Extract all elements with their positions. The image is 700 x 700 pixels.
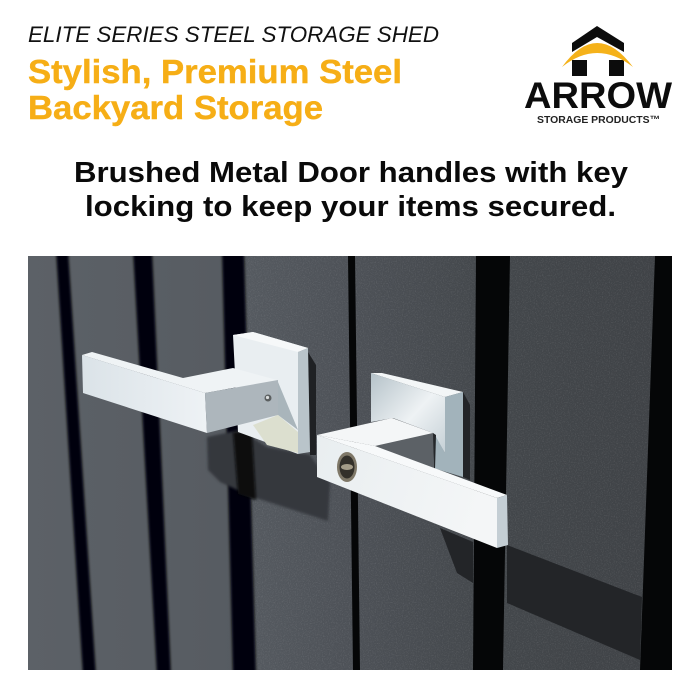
key lock cylinder [337,452,357,482]
photo: door handles on steel shed [28,250,672,676]
right door handle [317,373,508,548]
feature description: Brushed Metal Door handles with key [74,157,628,189]
shadow of left handle [207,430,330,521]
lever recess [375,433,434,468]
yellow heading [28,53,402,126]
mounting plate [371,373,463,397]
logo wordmark: ARROW [524,75,672,116]
left door handle [82,332,310,454]
feature description [74,157,628,223]
mounting plate [233,332,308,454]
Arrow Storage Products logo [524,26,672,126]
series title: ELITE SERIES STEEL STORAGE SHED [28,22,439,47]
shadow of right handle [440,392,642,660]
steel texture [240,256,672,670]
icon: house roof [562,26,633,76]
screw [264,394,272,402]
lever [317,418,433,446]
logo tagline: STORAGE PRODUCTS™ [537,114,660,126]
feature description: locking to keep your items secured. [85,191,616,223]
lever [82,352,236,393]
yellow heading: Stylish, Premium Steel [28,53,402,90]
steel wall [28,256,672,670]
yellow heading: Backyard Storage [28,89,323,126]
wall grooves [56,250,672,676]
